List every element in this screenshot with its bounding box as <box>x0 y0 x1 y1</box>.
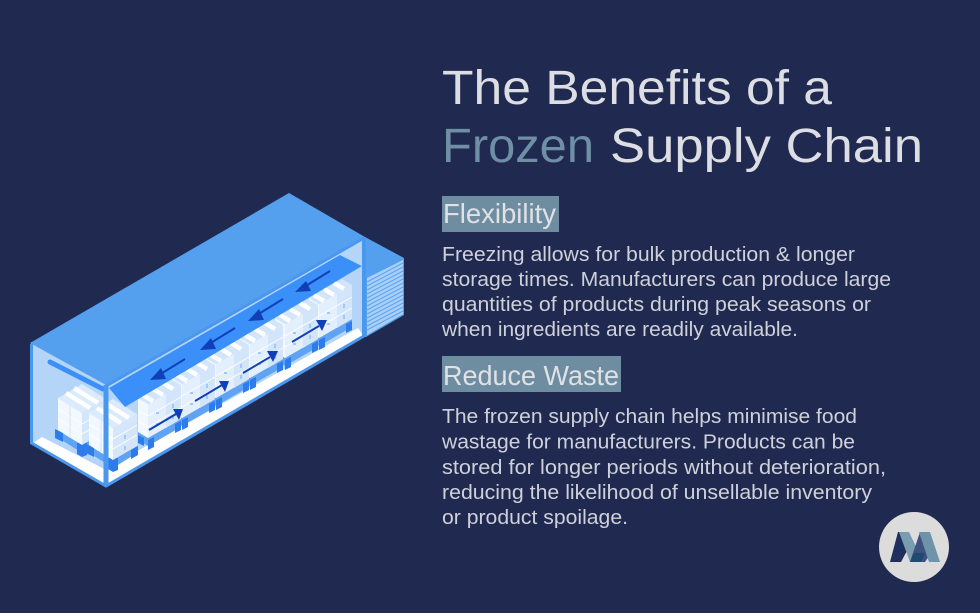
heading: Reduce Waste: Reduce Waste <box>443 360 619 391</box>
text block: Flexibility description <box>441 244 891 341</box>
text block: Reduce Waste description: stored for longer periods without deterioration, <box>442 457 886 479</box>
arrows: air flow along floor <box>149 320 327 430</box>
roof <box>30 193 365 385</box>
text block: Reduce Waste description: or product spoilage. <box>442 507 628 529</box>
pallets at the container end <box>55 384 138 472</box>
title: Frozen <box>442 120 594 173</box>
text block: Reduce Waste description: wastage for manufacturers. Products can be <box>441 432 855 454</box>
text block: Flexibility description: storage times. Manufacturers can produce large <box>442 269 891 291</box>
text block: Flexibility description: Freezing allows for bulk production & longer <box>442 244 855 266</box>
illustration: refrigerated shipping container <box>30 193 404 486</box>
title <box>442 62 923 173</box>
text block: Reduce Waste description: reducing the likelihood of unsellable inventory <box>442 482 872 504</box>
title: Supply Chain <box>610 120 923 173</box>
container interior walls <box>31 238 364 486</box>
container floor <box>33 328 363 485</box>
title: The Benefits of a <box>442 62 832 115</box>
inner roof rail <box>50 362 103 389</box>
cold air band under roof <box>109 243 362 407</box>
pallet row <box>138 279 352 450</box>
text block: Flexibility description: quantities of products during peak seasons or <box>442 294 871 316</box>
icon: company logo <box>879 512 949 582</box>
container frame <box>32 237 364 486</box>
text block: Reduce Waste description: The frozen supply chain helps minimise food <box>442 406 857 428</box>
container rear cooling unit <box>365 237 404 337</box>
arrows: air flow along roof <box>150 271 330 380</box>
heading: Flexibility: Flexibility <box>443 198 556 229</box>
text block: Reduce Waste description <box>441 406 886 529</box>
text block: Flexibility description: when ingredients are readily available. <box>441 319 798 341</box>
